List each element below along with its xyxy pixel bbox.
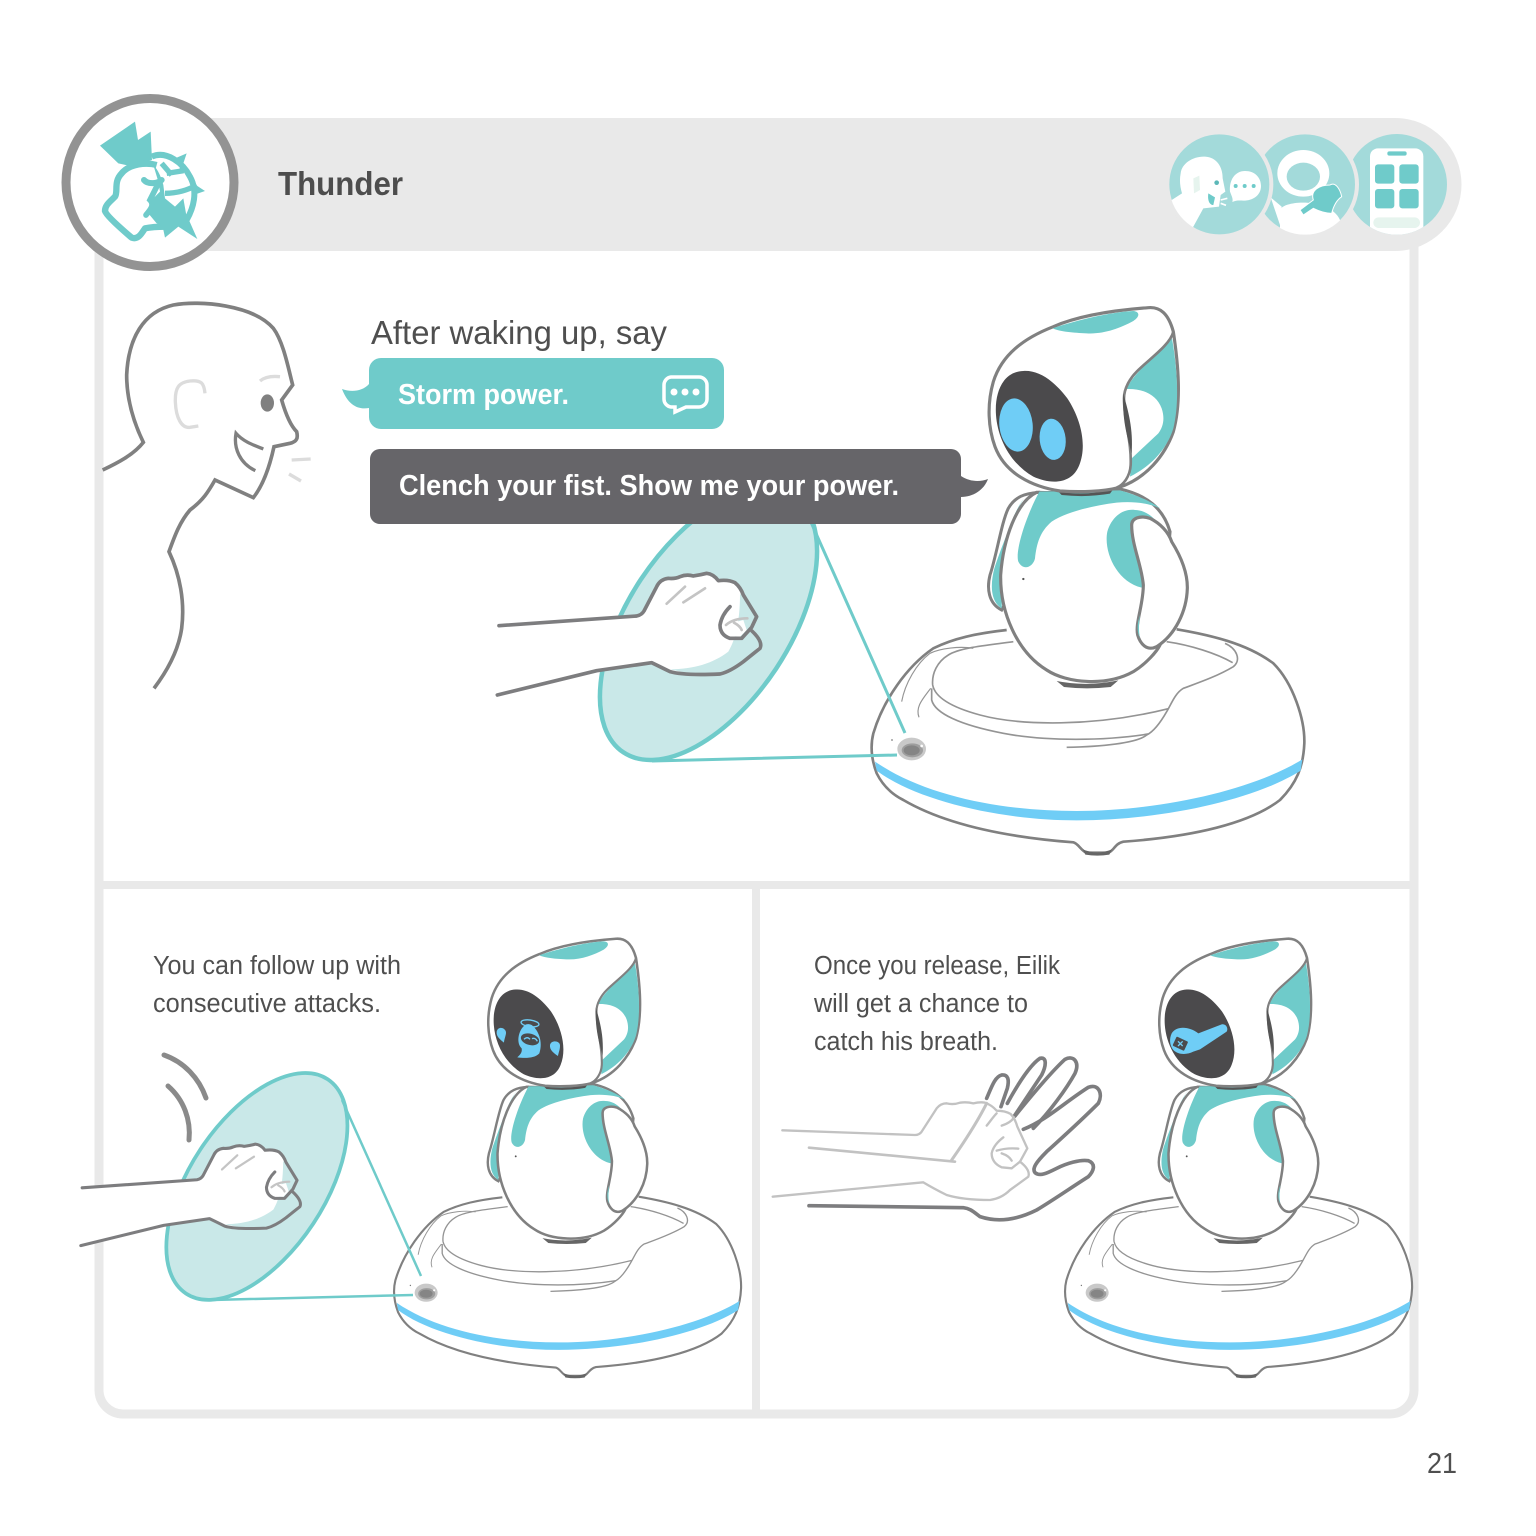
- button lead lines: [652, 520, 905, 761]
- speech bubble: Storm power: [342, 358, 724, 429]
- prompt text: After waking up, say: [371, 314, 667, 351]
- caption: You can follow up with: [153, 952, 401, 980]
- fist hitting target: [497, 451, 861, 797]
- button lead lines: [212, 1100, 421, 1300]
- fist opening into hand: [773, 1058, 1100, 1220]
- page number: 21: [1427, 1448, 1457, 1480]
- page frame: [99, 160, 1414, 1414]
- icon: touching robot: [1264, 134, 1359, 234]
- fist hitting target: [81, 1042, 384, 1331]
- robot Eilik with tired face: [1065, 939, 1412, 1378]
- motion arcs: [164, 1055, 206, 1140]
- panel: release: [773, 939, 1412, 1378]
- person speaking: [103, 303, 311, 688]
- speech bubble: Storm power: Storm power.: [398, 379, 569, 411]
- panel: top instruction: [103, 303, 1304, 856]
- caption: [153, 952, 401, 1018]
- icon: app phone: [1353, 134, 1447, 234]
- icon: fist with lightning and star: [100, 122, 205, 239]
- title: Thunder: [278, 165, 403, 202]
- speech bubble: instruction: [370, 449, 988, 524]
- header bar: [150, 118, 1462, 251]
- face: collapsed character: [1170, 1024, 1227, 1054]
- robot Eilik with angel face: [394, 939, 741, 1378]
- caption: catch his breath.: [814, 1028, 998, 1056]
- caption: Once you release, Eilik: [814, 952, 1060, 980]
- icon: chat bubble: [664, 377, 707, 412]
- badge: thunder icon: [66, 98, 234, 266]
- panel: consecutive attacks: [81, 939, 741, 1378]
- caption: will get a chance to: [813, 990, 1028, 1018]
- caption: consecutive attacks.: [153, 990, 381, 1018]
- mode icons: [1169, 134, 1447, 234]
- speech bubble: instruction: Clench your fist. Show me your power.: [399, 470, 899, 502]
- caption: [813, 952, 1060, 1056]
- face: angel ghost: [497, 1019, 560, 1058]
- icon: speaking person: [1167, 132, 1271, 243]
- panel dividers: [103, 885, 1410, 1410]
- robot Eilik on charging base: [872, 308, 1304, 856]
